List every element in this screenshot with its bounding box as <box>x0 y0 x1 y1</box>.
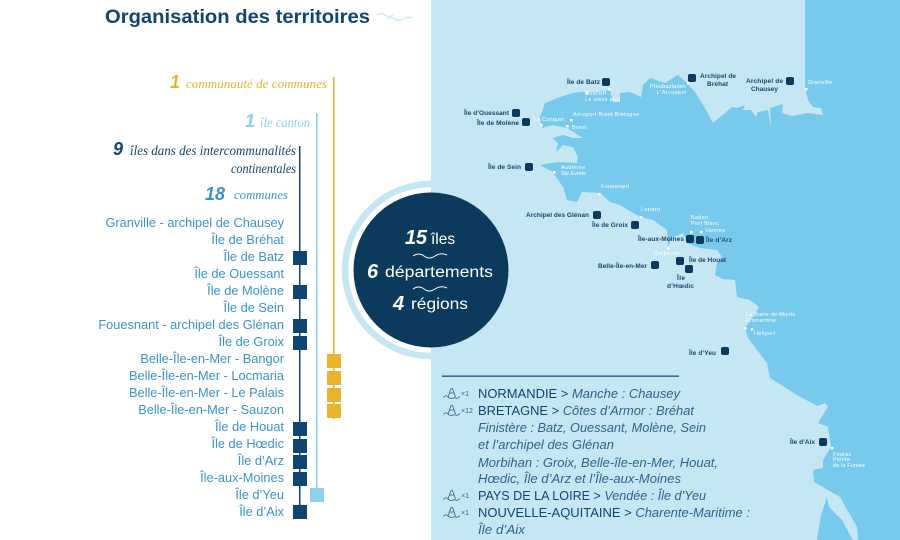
legend: regions and departments <box>442 376 750 537</box>
map: island markers <box>512 74 827 446</box>
legend: regions and departments: ×1 <box>461 510 469 517</box>
map: departure ports: Héliport <box>754 331 775 337</box>
map: departure ports: Vannes <box>705 228 725 234</box>
map: departure ports: Le vieux port <box>585 97 620 103</box>
legend: regions and departments: NORMANDIE > Manche : Chausey <box>478 386 681 401</box>
map: island labels: Île de Batz <box>566 77 601 86</box>
map: departure ports: La Barre-de-Monts <box>746 312 795 318</box>
map: departure ports: Ste Evette <box>561 171 586 177</box>
legend: regions and departments: BRETAGNE > Côtes d’Armor : Bréhat <box>478 403 695 418</box>
map: departure ports: Roscoff <box>585 91 606 97</box>
map: island labels: Île d’Ouessant <box>463 108 510 117</box>
map: island labels: Île de Sein <box>487 162 521 171</box>
map: island labels: Bréhat <box>707 81 729 88</box>
list: communes: Île d’Yeu <box>234 487 284 502</box>
map: departure ports: Fouras <box>833 452 851 458</box>
map: departure ports: Lorient <box>641 207 660 213</box>
heading: 1 île canton <box>245 111 310 131</box>
map: island labels: Belle-Île-en-Mer <box>598 261 647 270</box>
chart: île canton column <box>310 113 324 502</box>
list: communes: Granville - archipel de Chausey <box>105 215 285 230</box>
panel: left white background <box>0 0 431 540</box>
list: communes: Île de Hœdic <box>210 436 285 451</box>
legend: regions and departments: Île d’Aix <box>478 522 526 537</box>
list: communes: Belle-Île-en-Mer - Locmaria <box>129 368 285 383</box>
map: departure ports: Le Conquet <box>534 117 564 123</box>
list: communes: Île de Houat <box>214 419 284 434</box>
chart: intercommunalités column <box>293 146 307 519</box>
title: Organisation des territoires <box>105 6 370 28</box>
callout: key figures circle: 15 <box>405 227 428 249</box>
list: communes: Belle-Île-en-Mer - Bangor <box>140 351 285 366</box>
map: departure ports: Baden <box>691 215 708 221</box>
legend: regions and departments: ×1 <box>461 391 469 398</box>
list: communes: Belle-Île-en-Mer - Sauzon <box>138 402 284 417</box>
map: island labels: Île-aux-Moines <box>637 234 684 243</box>
map: departure ports: Port Blanc <box>691 221 719 227</box>
map: departure ports: Pointe <box>833 457 850 463</box>
legend: regions and departments: Hœdic, Île d’Arz et l’Île-aux-Moines <box>478 471 681 486</box>
heading: 9 îles dans des intercommunalités continentales: îles dans des intercommunalités <box>130 143 296 158</box>
map: departure ports: de la Fumée <box>833 463 865 469</box>
map: departure ports <box>534 80 865 469</box>
callout: key figures circle: 6 <box>367 261 379 283</box>
heading: 1 île canton: 1 <box>245 111 255 131</box>
list: communes: Île de Bréhat <box>210 232 284 247</box>
list: communes: Île d’Arz <box>237 453 284 468</box>
heading: 18 communes <box>205 184 288 204</box>
callout: key figures circle: départements <box>385 264 493 281</box>
legend: regions and departments: et l’archipel des Glénan <box>478 437 614 452</box>
list: communes: Île d’Aix <box>238 504 285 519</box>
decoration: title waves <box>377 14 412 20</box>
map: island labels: Île de Houat <box>688 255 727 264</box>
map: island labels: Archipel de <box>700 73 736 80</box>
map: departure ports: Audierne <box>561 165 585 171</box>
map: departure ports: Granville <box>808 80 832 86</box>
map: island labels: Chausey <box>751 86 778 93</box>
map: departure ports: Aéroport Brest Bretagne <box>573 112 639 118</box>
legend: regions and departments: ×1 <box>461 493 469 500</box>
heading: 9 îles dans des intercommunalités continentales: 9 <box>113 139 123 159</box>
heading: 18 communes: communes <box>234 187 288 202</box>
map: island labels: Île de Molène <box>476 118 519 127</box>
map: French Atlantic coast land <box>540 0 900 540</box>
list: communes: Île de Sein <box>223 300 284 315</box>
map: island labels: Île de Groix <box>591 220 628 229</box>
legend: regions and departments: NOUVELLE-AQUITAINE > Charente-Maritime : <box>478 505 750 520</box>
heading: 1 communauté de communes <box>170 72 327 92</box>
heading: 9 îles dans des intercommunalités continentales: continentales <box>231 161 296 176</box>
list: communes: Île-aux-Moines <box>199 470 284 485</box>
heading: 18 communes: 18 <box>205 184 225 204</box>
map: departure ports: Quiberon <box>654 251 679 257</box>
list: communes: Île de Ouessant <box>193 266 284 281</box>
map: island labels: Archipel de <box>746 78 783 85</box>
list: communes: Île de Molène <box>206 283 284 298</box>
map: departure ports: Ploubazlanec <box>650 84 686 90</box>
map: island labels: Île d’Arz <box>705 235 733 244</box>
list: communes <box>98 215 285 519</box>
list: communes: Belle-Île-en-Mer - Le Palais <box>129 385 284 400</box>
map: departure ports: Fouesnant <box>601 184 629 190</box>
map: island labels: d’Hœdic <box>667 283 694 290</box>
chart: communauté de communes column <box>327 77 341 419</box>
map: departure ports: Fromentine <box>746 318 776 324</box>
map: departure ports: L’Arcouest <box>657 90 686 96</box>
heading: 1 communauté de communes: 1 <box>170 72 180 92</box>
callout: key figures circle <box>345 184 508 356</box>
list: communes: Île de Groix <box>218 334 285 349</box>
map: island labels: Île <box>676 273 685 282</box>
legend: regions and departments: Finistère : Batz, Ouessant, Molène, Sein <box>478 420 706 435</box>
callout: key figures circle: 4 <box>392 293 404 315</box>
heading: 9 îles dans des intercommunalités continentales <box>113 139 296 176</box>
heading: 1 île canton: île canton <box>260 116 310 131</box>
map: island labels: Archipel des Glénan <box>526 212 589 219</box>
list: communes: Fouesnant - archipel des Glénan <box>98 317 284 332</box>
heading: 1 communauté de communes: communauté de communes <box>186 76 327 91</box>
map: island labels <box>463 73 815 446</box>
panel: map sea background <box>431 0 900 540</box>
callout: key figures circle: régions <box>411 296 468 313</box>
legend: regions and departments: PAYS DE LA LOIRE > Vendée : Île d’Yeu <box>478 488 706 503</box>
legend: regions and departments: ×12 <box>461 408 473 415</box>
list: communes: Île de Batz <box>223 249 284 264</box>
callout: key figures circle: îles <box>430 231 455 248</box>
map: island labels: Île d’Yeu <box>688 348 716 357</box>
legend: regions and departments: Morbihan : Groix, Belle-île-en-Mer, Houat, <box>478 455 718 470</box>
map: island labels: Île d’Aix <box>789 437 815 446</box>
map: departure ports: Brest <box>572 125 586 131</box>
